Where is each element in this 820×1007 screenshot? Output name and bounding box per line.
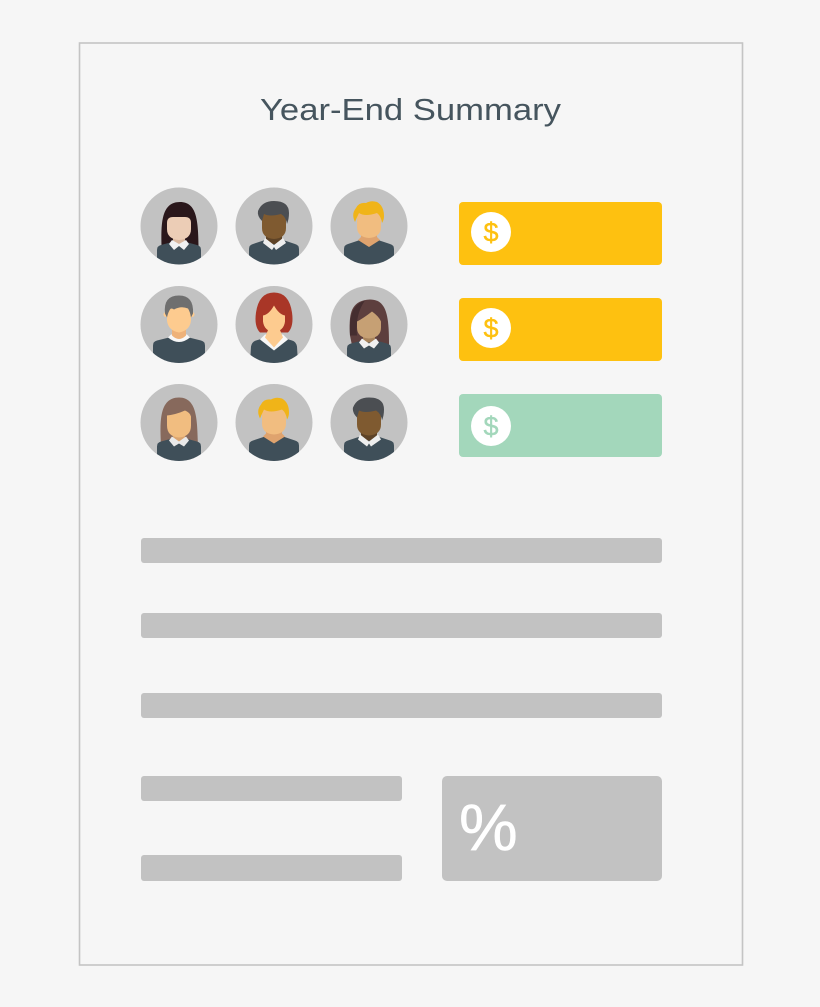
icon: dollar coin 3: $ [483,412,499,442]
avatar: man with grey hair [140,286,218,364]
icon: dollar coin 1 [471,212,511,252]
panel: yellow dollar bar 1 [459,202,662,265]
icon: dollar coin 2: $ [483,314,499,344]
avatar: man with dark skin and grey hair [236,188,312,265]
placeholder line 2 [141,613,662,638]
title: Year-End Summary [260,92,562,127]
panel: yellow dollar bar 2 [459,298,662,361]
avatar: woman with light brown hair [140,384,218,462]
avatar: woman with dark hair [140,188,218,265]
placeholder line 4 [141,776,402,801]
icon: dollar coin 1: $ [483,218,499,248]
panel: green dollar bar [459,394,662,457]
avatar: man with blonde hair [330,188,408,265]
placeholder line 5 [141,855,402,881]
avatar grid [140,188,408,462]
avatar: woman with brown hair [330,286,408,364]
placeholder line 3 [141,693,662,718]
avatar: woman with red hair [236,286,312,364]
placeholder line 1 [141,538,662,563]
avatar: man with dark skin [330,384,408,462]
icon: dollar coin 3 [471,406,511,446]
panel: percent box [442,776,662,881]
icon: dollar coin 2 [471,308,511,348]
avatar: man with golden hair [236,384,312,462]
percent symbol: % [459,790,518,864]
panel: document page [80,43,742,965]
